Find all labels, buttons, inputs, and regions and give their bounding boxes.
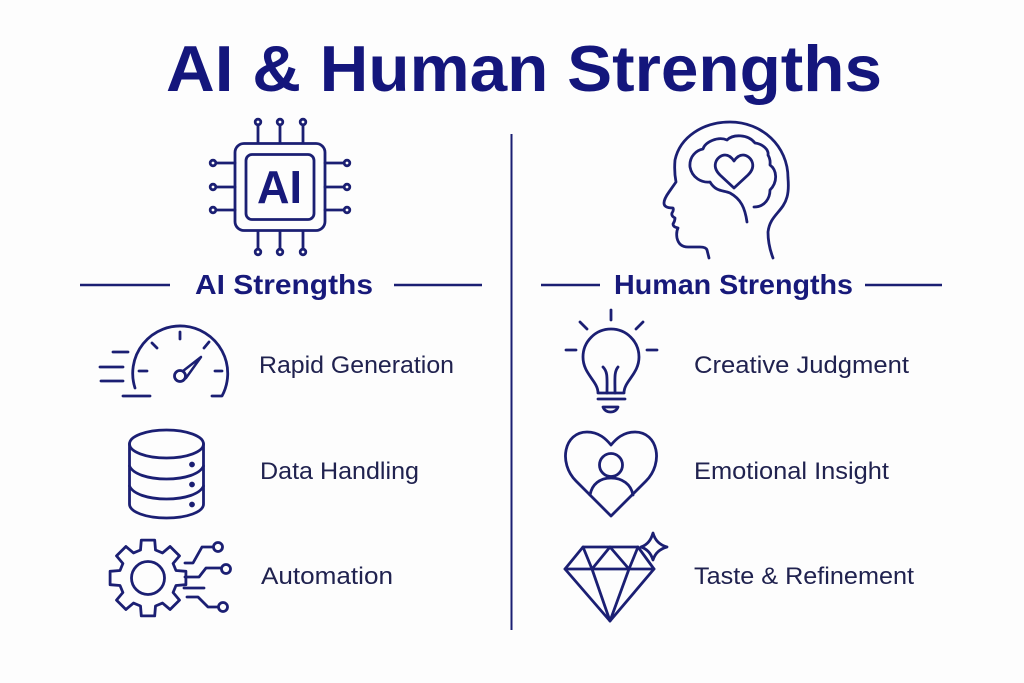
icon: heart with person — [565, 432, 657, 516]
heading: Human Strengths: Human Strengths — [614, 269, 853, 300]
label: Data Handling: Data Handling — [260, 458, 419, 485]
label: Emotional Insight: Emotional Insight — [694, 458, 889, 485]
icon: gear with circuit lines — [110, 540, 230, 616]
icon: diamond with sparkle — [565, 533, 667, 621]
icon: database — [130, 430, 204, 518]
title: AI & Human Strengths — [166, 32, 882, 105]
label: Automation: Automation — [261, 563, 393, 590]
label: Rapid Generation: Rapid Generation — [259, 352, 454, 379]
icon: AI chip — [210, 119, 350, 255]
icon: AI chip: AI — [257, 161, 302, 213]
center divider — [510, 134, 512, 630]
panel: AI strengths — [80, 119, 482, 616]
panel: human strengths — [541, 122, 942, 621]
icon: speedometer — [100, 326, 228, 396]
icon: light bulb — [566, 310, 657, 412]
label: Taste & Refinement: Taste & Refinement — [694, 563, 914, 590]
icon: head with brain and heart — [664, 122, 788, 258]
label: Creative Judgment: Creative Judgment — [694, 352, 909, 379]
heading: AI Strengths: AI Strengths — [195, 269, 373, 300]
